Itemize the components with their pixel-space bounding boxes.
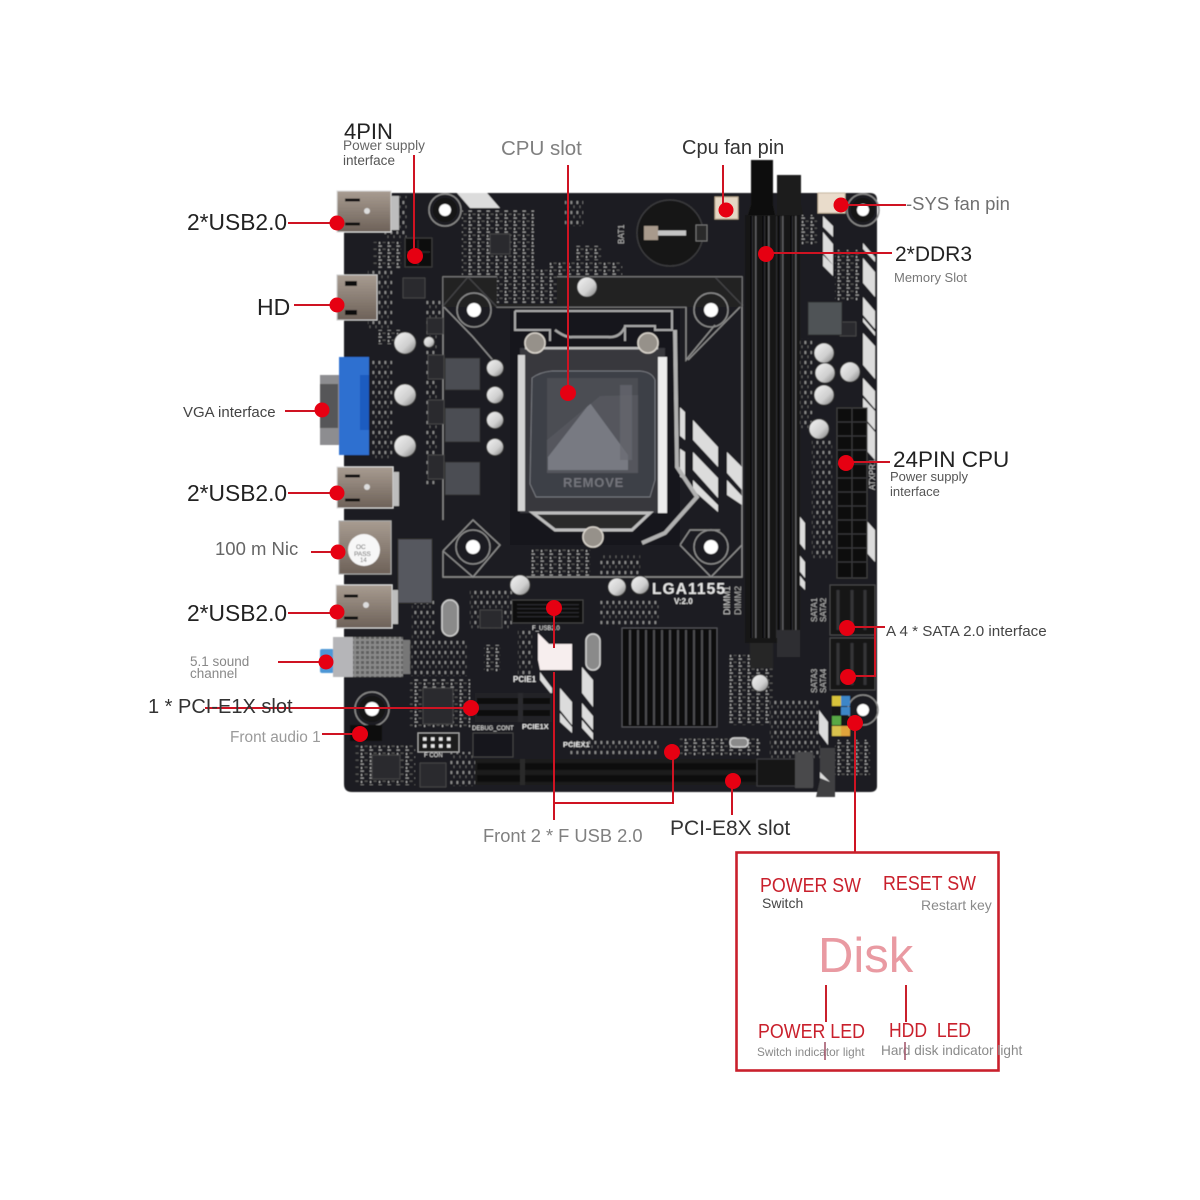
label: PCI-E8X slot: PCI-E8X slot (670, 817, 790, 840)
front audio header (350, 725, 459, 752)
label: USB top: 2*USB2.0 (187, 209, 287, 235)
label: 4PIN (343, 119, 425, 168)
white connector (538, 633, 572, 670)
label: Cpu fan pin: Cpu fan pin (682, 137, 784, 159)
top bracket (515, 311, 672, 341)
white stripes (457, 193, 875, 745)
USB front header (512, 600, 583, 623)
board silkscreen text: DIMM2 (733, 586, 743, 615)
board silkscreen text: PCIE1 (513, 675, 537, 684)
label: CPU slot: CPU slot (501, 137, 582, 160)
power chokes (445, 302, 842, 495)
label: 2*DDR3: Memory Slot (894, 270, 967, 285)
screws (525, 333, 545, 353)
PCB mounting holes (355, 194, 879, 726)
RESET SW: RESET SW (883, 873, 976, 895)
memory clips (748, 160, 775, 215)
USB port middle (337, 467, 399, 508)
panel: front panel pin box (736, 852, 1023, 1070)
debug header (473, 733, 513, 757)
4-pin power connector (405, 238, 432, 267)
LAN transformer (398, 539, 432, 603)
label: USB lower: 2*USB2.0 (187, 600, 287, 626)
label: 24PIN CPU (890, 447, 1009, 499)
CPU socket (510, 308, 697, 547)
front panel pins (832, 696, 850, 736)
board silkscreen text: PCIE1X (522, 722, 549, 731)
darker socket zone (443, 277, 742, 307)
POWER SW: POWER SW (760, 875, 861, 897)
label: 100 m Nic: 100 m Nic (215, 538, 298, 559)
label: HD: HD (257, 294, 290, 320)
PCI-E x16 slot (475, 748, 835, 797)
label: 5.1 sound channel (190, 654, 249, 681)
label: 4PIN: 4PIN (344, 119, 393, 144)
CPU fan header (715, 197, 738, 219)
POWER LED: POWER LED (758, 1021, 865, 1043)
label: VGA: VGA interface (183, 404, 276, 421)
label: Front USB: Front 2 * F USB 2.0 (483, 825, 643, 846)
LAN port: PASS (354, 551, 372, 558)
socket cover (530, 371, 655, 497)
Switch indicator light: Switch indicator light (757, 1045, 865, 1059)
board silkscreen text: DIMM1 (722, 586, 732, 615)
label: SATA: A 4 * SATA 2.0 interface (886, 623, 1047, 640)
capacitors (394, 277, 860, 692)
audio jack (320, 637, 410, 677)
VGA port (320, 357, 369, 455)
label: 24PIN CPU: interface (890, 484, 940, 499)
label: 2*DDR3 (894, 243, 972, 285)
board silkscreen text: SATA1 (810, 597, 819, 622)
LAN port: OC (356, 544, 366, 551)
board silkscreen text (424, 459, 877, 759)
PCB trace outline (443, 277, 742, 577)
board silkscreen text: ATXPR1 (868, 459, 877, 490)
label: 2*DDR3: 2*DDR3 (895, 243, 972, 266)
motherboard (320, 160, 879, 797)
LAN port: 14 (360, 558, 367, 564)
board silkscreen text: SATA2 (819, 597, 828, 622)
board silkscreen text: V:2.0 (674, 597, 693, 606)
REMOVE label: REMOVE (563, 475, 624, 490)
PCB (344, 193, 877, 792)
socket lever (642, 330, 697, 543)
label: USB middle: 2*USB2.0 (187, 480, 287, 506)
Disk: Disk (818, 929, 914, 983)
bottom trapezoid (533, 513, 650, 530)
label: 5.1 sound channel: 5.1 sound (190, 654, 249, 669)
lower pin ticks (825, 1042, 905, 1060)
USB port lower (336, 585, 398, 628)
LAN port (339, 521, 391, 574)
USB port top (337, 191, 399, 232)
socket plate (520, 348, 665, 513)
label: 24PIN CPU: 24PIN CPU (893, 447, 1009, 472)
board silkscreen text: DEBUG_CONT (472, 726, 514, 732)
board silkscreen text: SATA3 (810, 668, 819, 693)
label: SYS fan pin: -SYS fan pin (906, 193, 1010, 214)
SMD component clusters (355, 196, 870, 786)
board silkscreen text: F_USB2.0 (532, 626, 560, 632)
chipset heatsink (622, 628, 717, 727)
board silkscreen text: SATA4 (819, 668, 828, 693)
PCI-E x1 slot (475, 693, 552, 722)
callout dots (314, 198, 863, 789)
board silkscreen text: PCIEX1 (563, 740, 590, 749)
memory slots (745, 160, 803, 668)
Restart key: Restart key (921, 897, 992, 913)
callout lines (205, 155, 906, 852)
HDMI port (337, 275, 377, 320)
label: 4PIN: interface (343, 153, 395, 168)
label: PCI-E1X slot: 1 * PCI-E1X slot (148, 696, 293, 718)
label: Front audio: Front audio 1 (230, 729, 321, 746)
left frame bar (518, 355, 525, 511)
system fan header (818, 193, 845, 213)
board silkscreen text: F CON (424, 753, 443, 759)
Switch: Switch (762, 895, 803, 911)
24-pin ATX connector (837, 408, 867, 578)
crystals (442, 600, 748, 747)
pin lines (826, 985, 906, 1022)
label: 5.1 sound channel: channel (190, 666, 237, 681)
board silkscreen text: LGA1155 (652, 581, 726, 598)
white socket bar (658, 357, 667, 513)
label: 24PIN CPU: Power supply (890, 469, 969, 484)
CPU battery holder (617, 200, 707, 266)
CPU battery holder: BAT1 (617, 224, 626, 244)
label: 4PIN: Power supply (343, 138, 425, 153)
SATA connectors (830, 585, 875, 690)
IC chips (372, 234, 856, 787)
Hard disk indicator light: Hard disk indicator light (881, 1043, 1023, 1058)
HDD LED: HDD LED (889, 1020, 971, 1042)
